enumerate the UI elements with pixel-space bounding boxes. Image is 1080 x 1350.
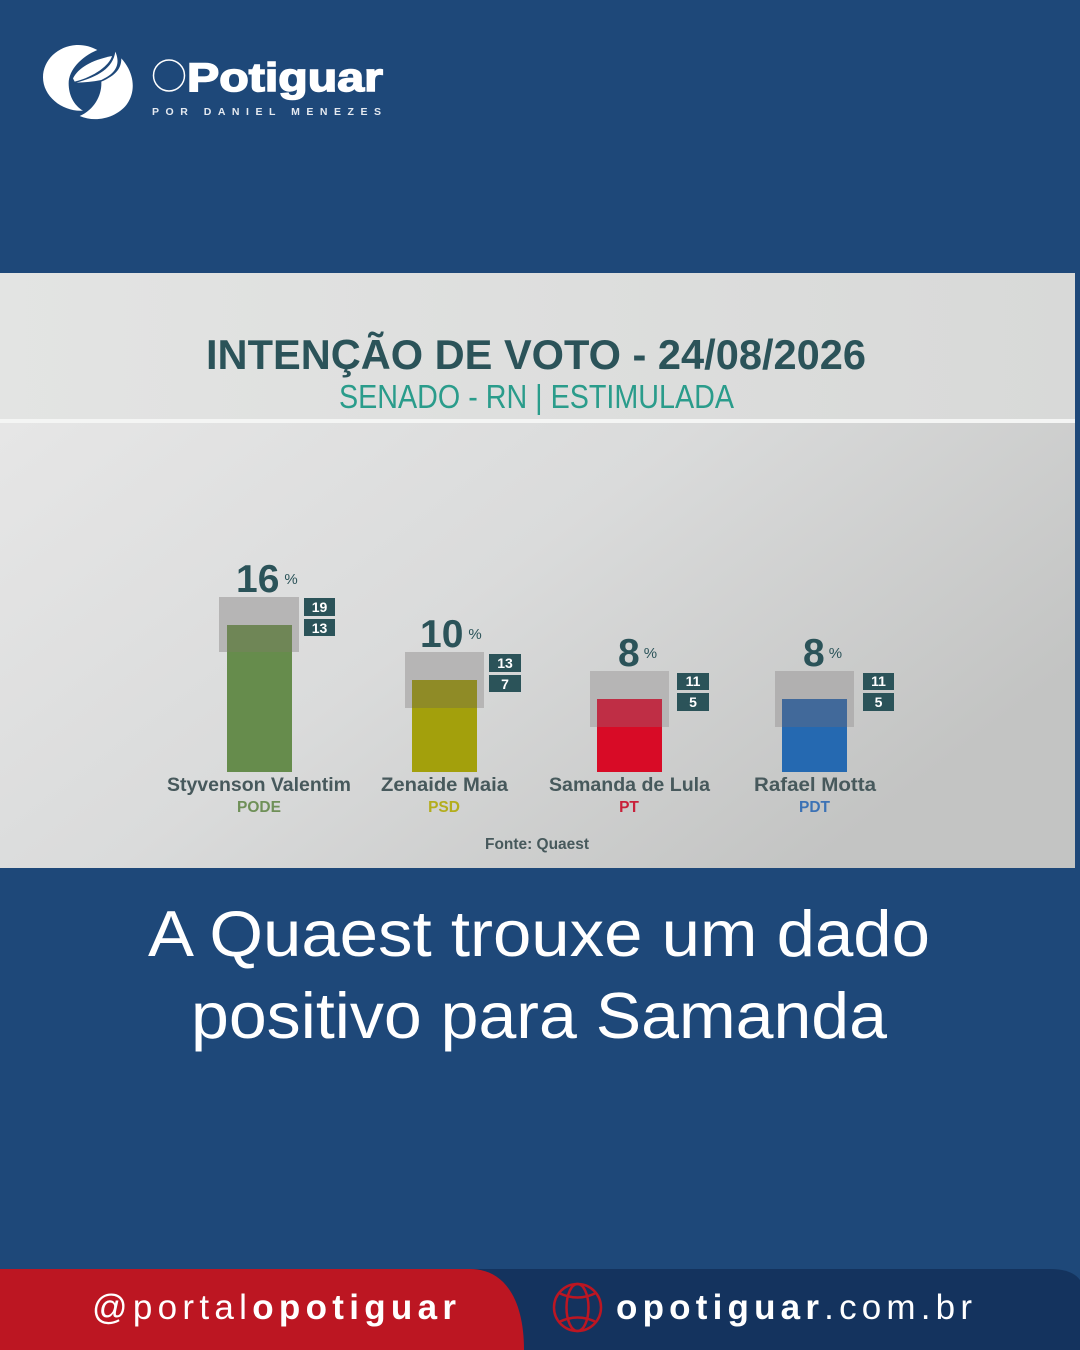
- candidate: Styvenson Valentim: [167, 558, 351, 816]
- name: Zenaide Maia: [381, 775, 508, 796]
- party: PSD: [428, 799, 460, 816]
- candidate: Zenaide Maia: [381, 613, 521, 816]
- margin of error: 19: [312, 599, 327, 615]
- name: Styvenson Valentim: [167, 775, 351, 796]
- margin of error: [677, 673, 709, 711]
- icon: globe: [554, 1284, 601, 1331]
- footer bar: [0, 1269, 1080, 1350]
- chart title: INTENÇÃO DE VOTO - 24/08/2026: [206, 331, 866, 378]
- margin of error: 11: [871, 673, 886, 689]
- margin of error: 5: [689, 694, 697, 710]
- headline: A Quaest trouxe um dado: [148, 897, 930, 970]
- name: Samanda de Lula: [549, 775, 710, 796]
- value: %: [644, 645, 657, 662]
- value: %: [468, 626, 482, 643]
- headline: positivo para Samanda: [191, 979, 888, 1052]
- margin of error: 11: [686, 673, 701, 689]
- candidate: Samanda de Lula: [549, 632, 710, 816]
- name: Rafael Motta: [754, 775, 876, 796]
- margin of error: 13: [312, 620, 327, 636]
- logo: [43, 45, 383, 119]
- website: opotiguar.com.br: [616, 1288, 972, 1327]
- party: PODE: [237, 799, 281, 816]
- value: 8: [803, 632, 825, 675]
- source: Fonte: Quaest: [485, 836, 589, 853]
- icon: logo mark: [43, 45, 133, 119]
- panel: poll chart image: [0, 273, 1075, 868]
- chart subtitle: SENADO - RN | ESTIMULADA: [339, 378, 734, 415]
- value: 10: [420, 613, 463, 656]
- headline: [148, 897, 930, 1052]
- social handle: @portalopotiguar: [92, 1288, 456, 1327]
- value: %: [284, 571, 298, 588]
- logo tagline: POR DANIEL MENEZES: [152, 106, 381, 118]
- value: 8: [618, 632, 640, 675]
- margin of error: 13: [497, 655, 513, 671]
- margin of error: 7: [501, 676, 509, 692]
- margin of error: 5: [875, 694, 883, 710]
- footer: red social tab: [0, 1269, 524, 1350]
- party: PDT: [799, 799, 831, 816]
- value: 16: [236, 558, 279, 601]
- margin of error: [489, 654, 521, 692]
- party: PT: [619, 799, 639, 816]
- margin of error: [304, 598, 335, 636]
- value: %: [829, 645, 842, 662]
- margin of error: [863, 673, 894, 711]
- candidate: Rafael Motta: [754, 632, 894, 816]
- logo wordmark: Potiguar: [187, 56, 383, 100]
